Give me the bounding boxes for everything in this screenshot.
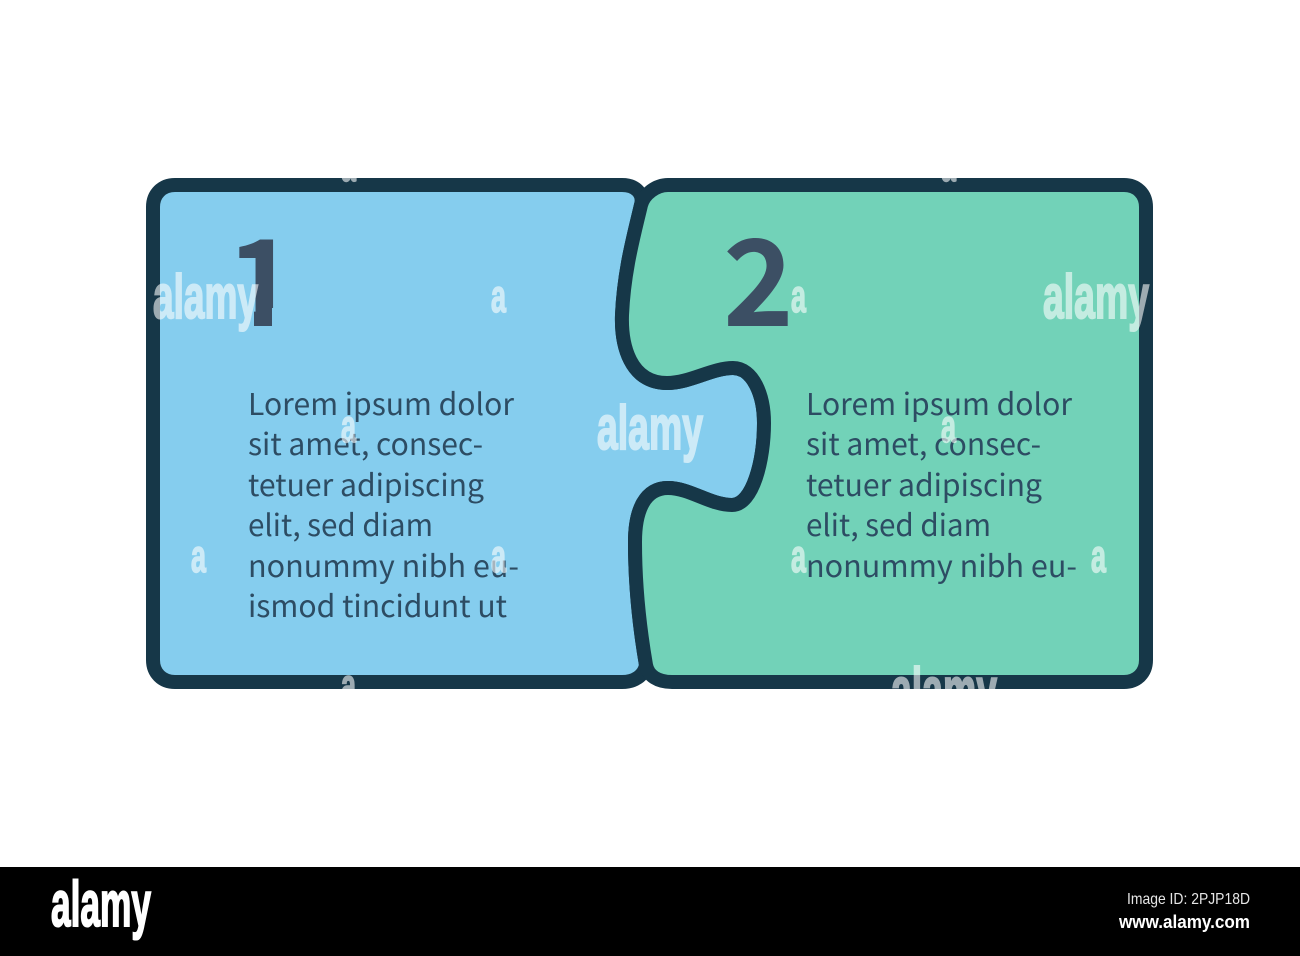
text block: piece 2: Lorem ipsum dolor <box>806 380 1072 424</box>
watermarks: a <box>191 530 206 582</box>
watermarks: alamy <box>153 263 258 332</box>
text block: piece 1: Lorem ipsum dolor <box>248 380 514 424</box>
watermarks: a <box>941 139 956 191</box>
text block: piece 1: elit, sed diam <box>248 501 433 545</box>
website: www.alamy.com <box>1118 912 1250 932</box>
watermarks: alamy <box>1043 263 1149 332</box>
text block: piece 2: sit amet, consec- <box>806 420 1041 464</box>
text block: piece 1: tetuer adipiscing <box>248 461 484 505</box>
watermarks: a <box>491 530 506 582</box>
number 2: 2 <box>723 187 794 361</box>
text block: piece 1: nonummy nibh eu- <box>248 542 519 586</box>
watermarks: a <box>791 270 806 322</box>
text block: piece 1 <box>248 380 519 626</box>
panel: puzzle piece 1 (blue) <box>153 185 764 682</box>
watermarks: a <box>341 139 356 191</box>
footer bar <box>0 867 1300 956</box>
text block: piece 2 <box>806 380 1077 586</box>
text block: piece 1: sit amet, consec- <box>248 420 483 464</box>
watermarks <box>153 139 1149 725</box>
watermarks: a <box>791 530 806 582</box>
panel: puzzle piece 2 (green) <box>622 185 1146 682</box>
text block: piece 2: elit, sed diam <box>806 501 991 545</box>
text block: piece 2: tetuer adipiscing <box>806 461 1042 505</box>
footer logo: alamy <box>51 868 151 940</box>
watermarks: alamy <box>597 394 703 463</box>
watermarks: a <box>1091 530 1106 582</box>
watermarks: a <box>341 400 356 452</box>
watermarks: a <box>491 270 506 322</box>
watermarks: a <box>341 659 356 711</box>
number 1: 1 <box>226 187 297 361</box>
text block: piece 2: nonummy nibh eu- <box>806 542 1077 586</box>
text block: piece 1: ismod tincidunt ut <box>248 582 507 626</box>
watermarks: a <box>941 400 956 452</box>
image id: Image ID: 2PJP18D <box>1127 891 1250 908</box>
watermarks: alamy <box>891 656 997 725</box>
